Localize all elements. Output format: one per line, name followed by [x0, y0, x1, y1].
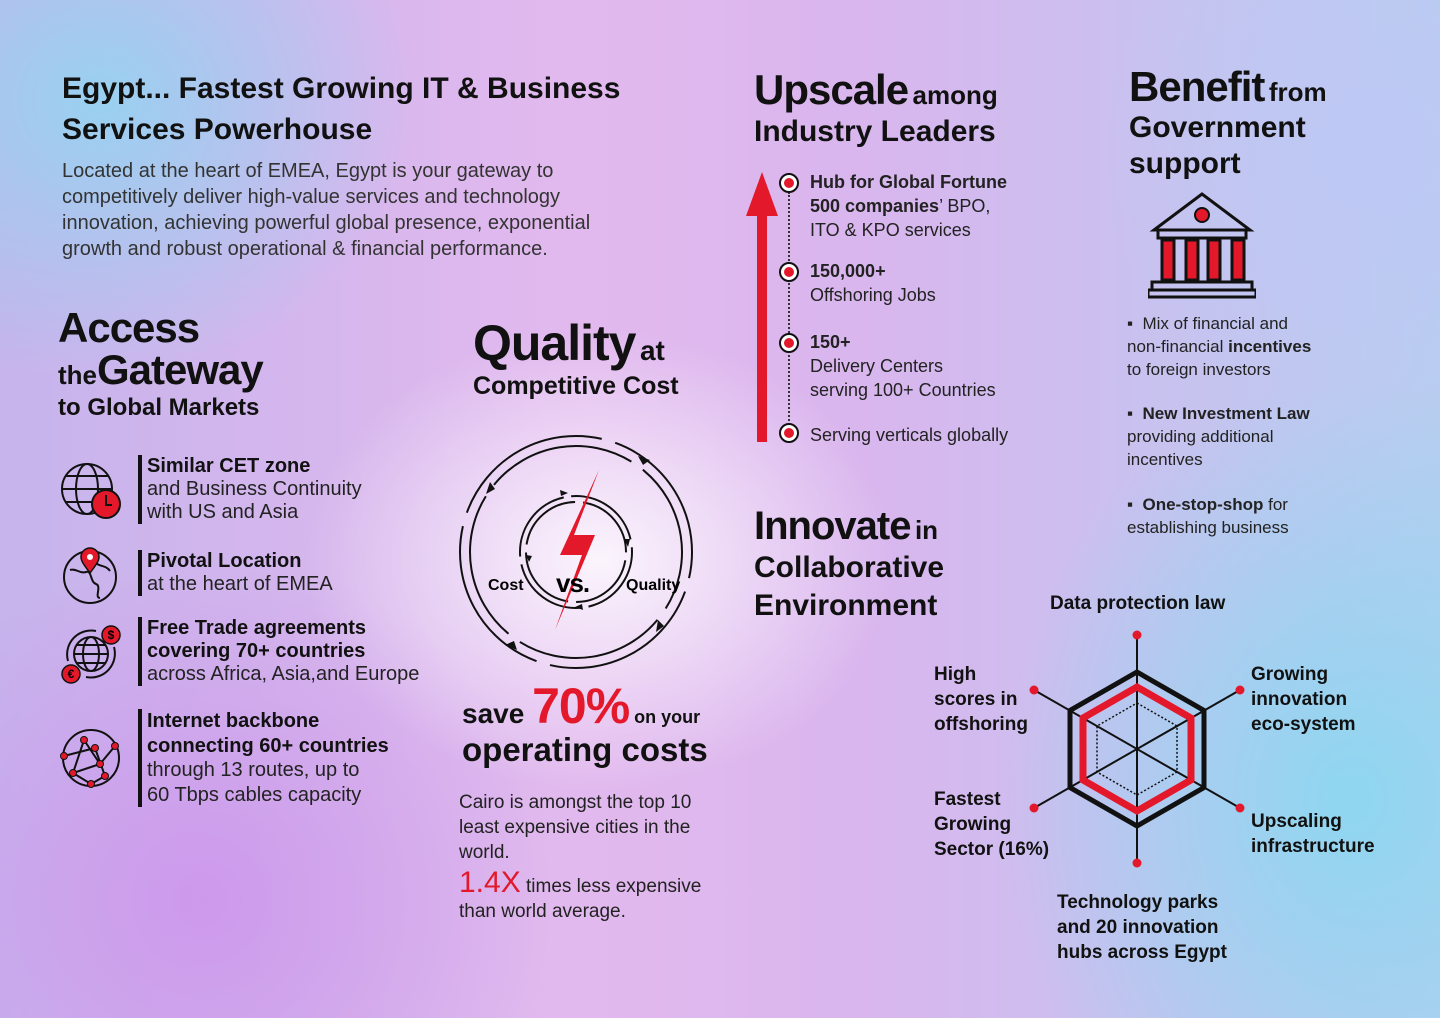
text: establishing business: [1127, 518, 1289, 537]
upscale items: Serving verticals globally: [810, 425, 1008, 445]
upscale items: 500 companies’ BPO,: [810, 196, 990, 216]
chart: cost vs quality cycle: Cost: [488, 577, 524, 594]
heading: quality at competitive cost: Quality at: [473, 315, 665, 371]
stat: 1.4X: 1.4X times less expensive than world average.: [459, 866, 701, 922]
title: [62, 72, 620, 146]
text: Growing: [1251, 664, 1328, 685]
heading: innovate: [754, 504, 944, 622]
icon: government building: [1148, 192, 1256, 298]
item: pivotal location: Pivotal Location: [147, 550, 301, 572]
text: incentives: [1127, 450, 1203, 469]
benefit bullets: to foreign investors: [1127, 360, 1271, 379]
upscale items: 150,000+: [810, 261, 886, 281]
heading: access the gateway: [58, 304, 264, 421]
heading: upscale: Upscale among: [754, 66, 998, 113]
chart: cost vs quality cycle: [459, 435, 693, 669]
text: eco-system: [1251, 714, 1356, 735]
heading: quality at competitive cost: Competitive Cost: [473, 372, 679, 400]
text: scores in: [934, 689, 1017, 710]
heading: upscale: [754, 66, 998, 148]
heading: access the gateway: to Global Markets: [58, 394, 259, 421]
text: infrastructure: [1251, 836, 1375, 857]
arrow: upscale: [746, 172, 778, 442]
upscale items: Offshoring Jobs: [810, 285, 936, 305]
title: Services Powerhouse: [62, 113, 372, 146]
upscale items: Delivery Centers: [810, 356, 943, 376]
item: CET zone: [138, 455, 362, 524]
text: Upscaling: [1251, 811, 1342, 832]
item: pivotal location: [138, 550, 333, 596]
icon: globe pin: [63, 547, 117, 604]
text: ▪ One-stop-shop for: [1127, 495, 1288, 514]
text: and 20 innovation: [1057, 917, 1219, 938]
upscale items: ITO & KPO services: [810, 220, 971, 240]
stat: save 70%: operating costs: [462, 731, 708, 768]
heading: access the gateway: theGateway: [58, 346, 263, 393]
text: High: [934, 664, 976, 685]
heading: upscale: Industry Leaders: [754, 115, 996, 148]
text: offshoring: [934, 714, 1028, 735]
text: innovation: [1251, 689, 1347, 710]
item: internet backbone: connecting 60+ countries: [147, 734, 389, 756]
icon: trade globe: [61, 625, 121, 684]
heading: access the gateway: Access: [58, 304, 199, 351]
upscale items: 150+: [810, 332, 851, 352]
heading: quality at competitive cost: [473, 315, 679, 400]
item: pivotal location: at the heart of EMEA: [147, 573, 333, 595]
heading: innovate: Collaborative: [754, 551, 944, 584]
item: internet backbone: 60 Tbps cables capacity: [147, 784, 361, 806]
item: internet backbone: [138, 709, 389, 807]
item: CET zone: with US and Asia: [147, 501, 298, 523]
icon: globe clock: [61, 463, 121, 519]
stat: save 70%: save 70% on your: [462, 678, 700, 734]
stat: save 70%: [462, 678, 708, 768]
item: CET zone: Similar CET zone: [147, 455, 310, 477]
text: hubs across Egypt: [1057, 942, 1227, 963]
item: free trade: [138, 617, 419, 686]
text: Technology parks: [1057, 892, 1218, 913]
upscale items: Hub for Global Fortune: [810, 172, 1007, 192]
icon: trade globe: €: [68, 667, 75, 681]
text: cairo: Cairo is amongst the top 10 least expensive cities in the world.: [459, 792, 691, 863]
heading: innovate: Innovate in: [754, 504, 938, 548]
intro paragraph: Located at the heart of EMEA, Egypt is your gateway to competitively deliver high-value services and technology innovation, achieving powerful global presence, exponential growth and robust operational & financial performance.: [62, 160, 590, 260]
icon: network globe: [60, 729, 120, 788]
upscale items: serving 100+ Countries: [810, 380, 996, 400]
heading: innovate: Environment: [754, 589, 937, 622]
chart: cost vs quality cycle: vs.: [556, 568, 589, 598]
text: Fastest: [934, 789, 1001, 810]
title: Egypt... Fastest Growing IT & Business: [62, 72, 620, 105]
chart: cost vs quality cycle: Quality: [626, 577, 680, 594]
item: free trade: across Africa, Asia,and Europe: [147, 663, 419, 685]
icon: trade globe: $: [108, 628, 115, 642]
heading: benefit: [1129, 63, 1327, 180]
upscale items: [779, 172, 1008, 445]
item: free trade: covering 70+ countries: [147, 640, 365, 662]
item: free trade: Free Trade agreements: [147, 617, 366, 639]
heading: benefit: Government: [1129, 111, 1306, 144]
benefit bullets: [1127, 314, 1311, 379]
text: providing additional: [1127, 427, 1274, 446]
text: Growing: [934, 814, 1011, 835]
item: CET zone: and Business Continuity: [147, 478, 362, 500]
text: ▪ New Investment Law: [1127, 404, 1310, 423]
item: internet backbone: through 13 routes, up to: [147, 759, 359, 781]
benefit bullets: ▪ Mix of financial and: [1127, 314, 1288, 333]
radar labels: Data protection law: [1050, 593, 1225, 614]
text: Sector (16%): [934, 839, 1049, 860]
benefit bullets: non-financial incentives: [1127, 337, 1311, 356]
item: internet backbone: Internet backbone: [147, 710, 319, 732]
heading: benefit: Benefit from: [1129, 63, 1327, 110]
timeline line: [788, 192, 790, 432]
heading: benefit: support: [1129, 147, 1241, 180]
